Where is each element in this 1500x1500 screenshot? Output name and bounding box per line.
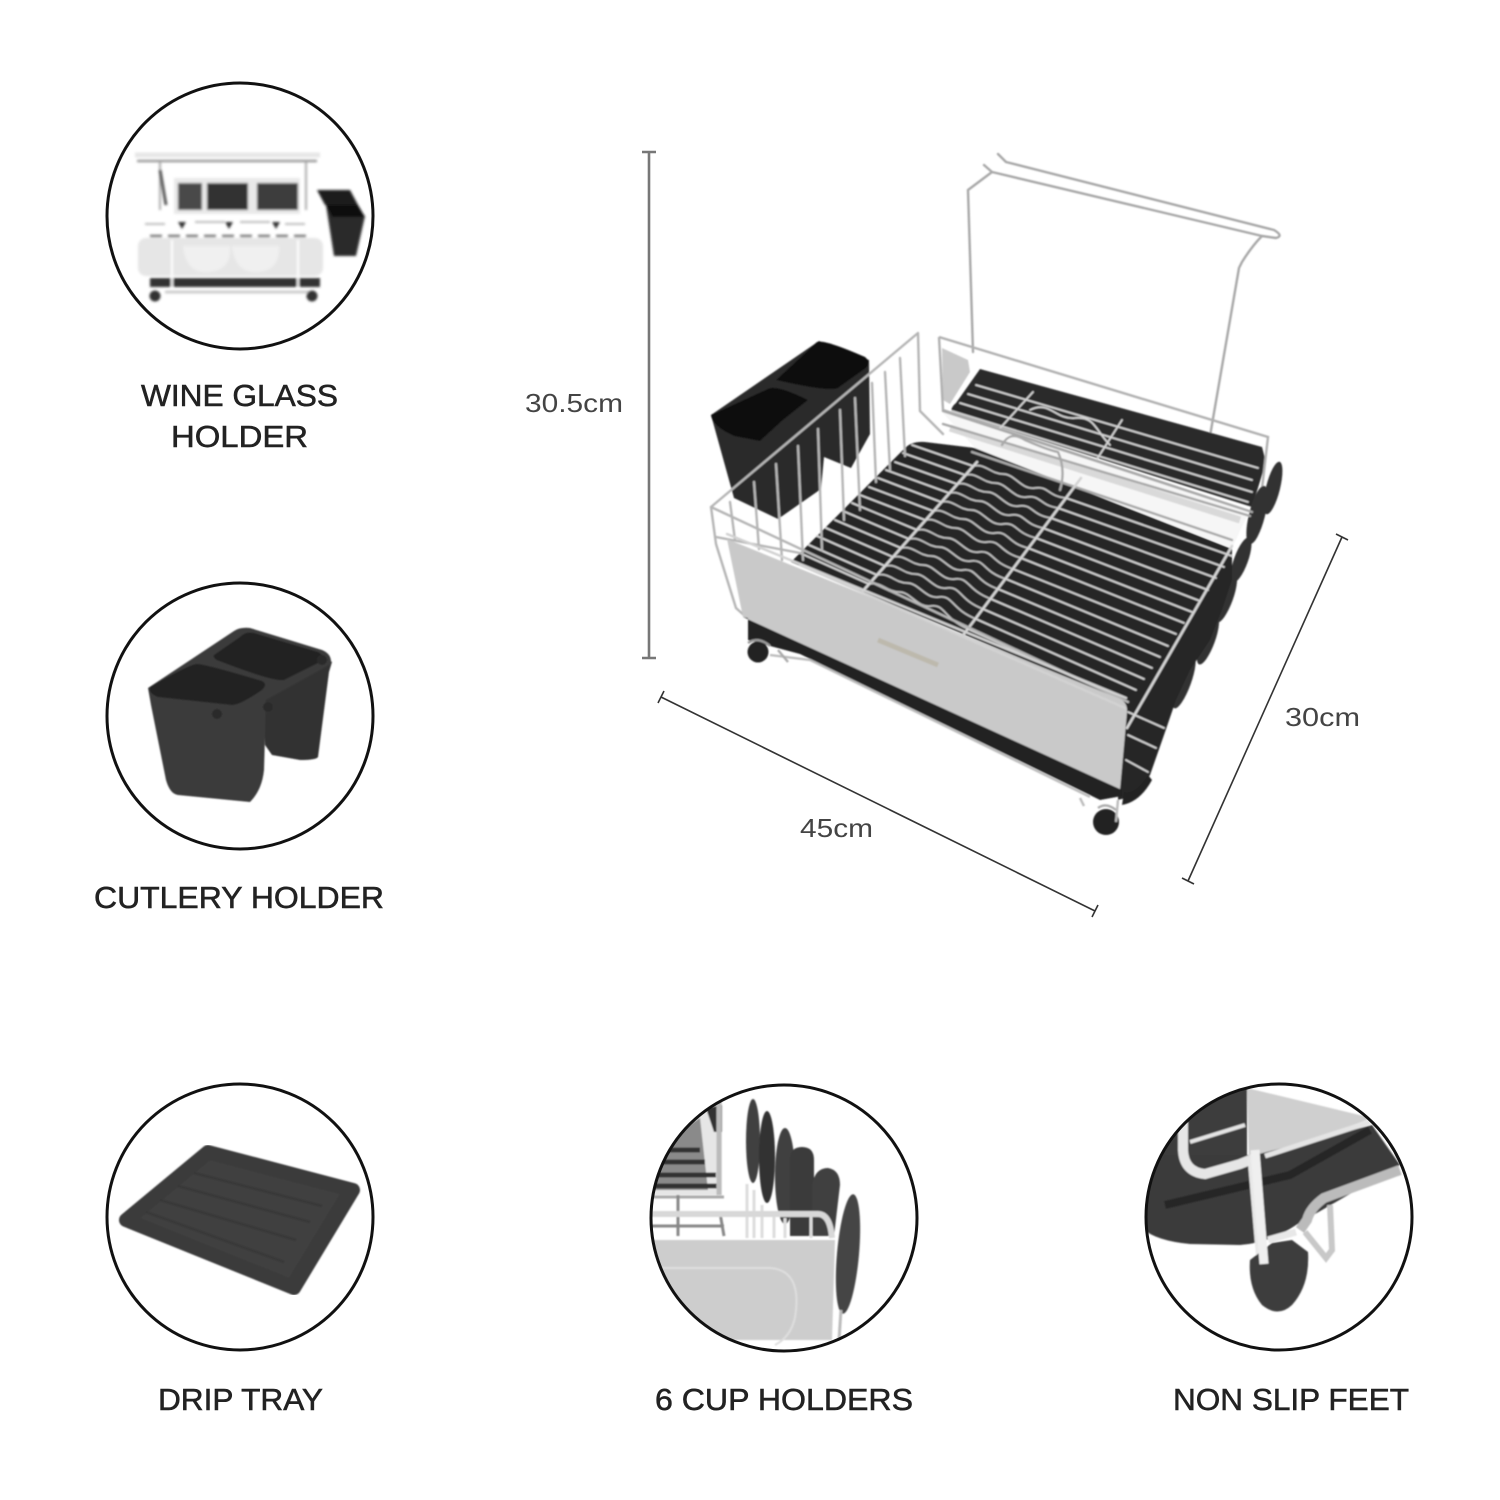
main dark tray: [791, 442, 1232, 800]
label: wine glass holder: WINE GLASS: [141, 378, 338, 413]
cup holder pegs: [1168, 460, 1286, 711]
panel: drip tray: [107, 1084, 373, 1417]
tray rungs left of the plate section: [800, 445, 973, 584]
ring: cutlery holder: [107, 583, 373, 849]
icon: non slip feet photo: [1140, 1085, 1400, 1312]
foot: right: [1080, 798, 1119, 835]
tray rungs right of the plate section: [968, 498, 1232, 772]
chart: height dimension 30.5cm: [525, 152, 656, 658]
wine glass frame: [968, 154, 1280, 436]
icon: wine glass holder photo: [135, 155, 365, 302]
base tray: [743, 617, 1122, 800]
base wire: [770, 655, 1090, 797]
white divider rail: [942, 412, 1250, 548]
cutlery holder: [711, 341, 870, 519]
left wire basket: [711, 333, 1128, 702]
front steel panel: [727, 539, 1127, 790]
panel: wine glass holder: [107, 83, 373, 454]
wavy plate wires: [869, 465, 1066, 629]
chart: width dimension 45cm: [658, 691, 1098, 917]
ring: wine glass holder: [107, 83, 373, 349]
ring: cup holders: [651, 1085, 917, 1351]
tray corner: [1122, 775, 1152, 805]
ring: drip tray: [107, 1084, 373, 1350]
chart: depth dimension 30cm: 30cm: [1285, 702, 1360, 732]
label: 6 cup holders: 6 CUP HOLDERS: [655, 1382, 913, 1417]
ring: non slip feet: [1146, 1084, 1412, 1350]
icon: drip tray photo: [126, 1152, 353, 1288]
chart: width dimension 45cm: 45cm: [800, 813, 873, 843]
panel: 6 cup holders: [650, 1085, 917, 1417]
cross wires: [862, 462, 1232, 728]
chart: depth dimension 30cm: [1182, 534, 1360, 884]
front rail: [727, 534, 1126, 708]
panel: cutlery holder: [94, 583, 384, 915]
label: drip tray: DRIP TRAY: [158, 1382, 323, 1417]
main product: dish rack: [711, 154, 1286, 835]
back rack frame: [939, 337, 1268, 512]
brand mark on panel: [878, 640, 938, 665]
label: non slip feet: NON SLIP FEET: [1173, 1382, 1409, 1417]
icon: cup holders photo: [650, 1099, 864, 1345]
icon: cutlery holder photo: [148, 628, 332, 802]
foot: left: [748, 640, 788, 662]
plate wire loops: [1002, 436, 1063, 490]
back dark tray: [952, 369, 1266, 507]
panel: non slip feet: [1140, 1084, 1412, 1417]
chart: height dimension 30.5cm: 30.5cm: [525, 388, 623, 418]
label: cutlery holder: CUTLERY HOLDER: [94, 880, 384, 915]
label: wine glass holder: HOLDER: [171, 419, 308, 454]
